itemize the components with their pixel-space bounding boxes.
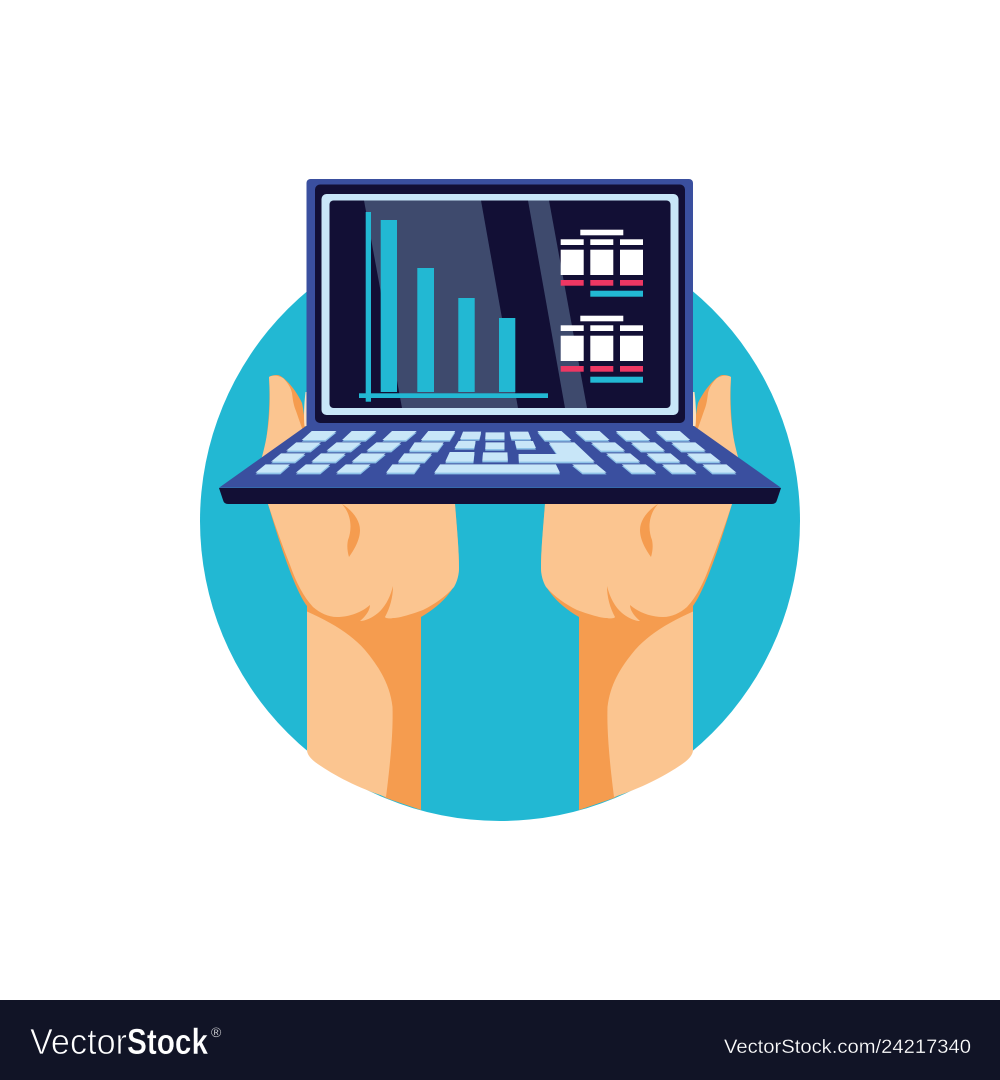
bar chart <box>359 212 548 402</box>
right thumb <box>692 375 742 470</box>
footer url: VectorStock.com/24217340 <box>724 1037 971 1058</box>
screen glare <box>364 200 587 408</box>
left thumb <box>258 375 308 470</box>
footer logo: Stock <box>127 1021 209 1062</box>
footer logo <box>30 1021 209 1062</box>
right palm <box>541 504 732 621</box>
key shadows <box>256 433 736 474</box>
right thumb crease <box>640 504 658 557</box>
right forearm <box>607 612 693 797</box>
key tops <box>256 431 736 473</box>
right palm outline shadow <box>541 504 732 810</box>
left thumb crease <box>342 504 360 557</box>
left forearm <box>307 612 393 797</box>
left palm outline shadow <box>268 504 459 810</box>
laptop base front edge <box>219 488 781 504</box>
laptop screen <box>330 200 670 408</box>
laptop base top <box>219 426 781 488</box>
lower data table <box>561 316 643 383</box>
background circle <box>200 221 800 821</box>
registered mark: ® <box>211 1024 222 1040</box>
footer bar <box>0 1000 1000 1080</box>
left hand <box>258 375 459 810</box>
left palm <box>268 504 459 621</box>
upper data table <box>561 230 643 297</box>
laptop <box>219 179 781 504</box>
right hand <box>541 375 742 810</box>
laptop lid <box>306 179 693 434</box>
footer logo: Vector <box>30 1021 127 1062</box>
keyboard <box>256 431 736 474</box>
